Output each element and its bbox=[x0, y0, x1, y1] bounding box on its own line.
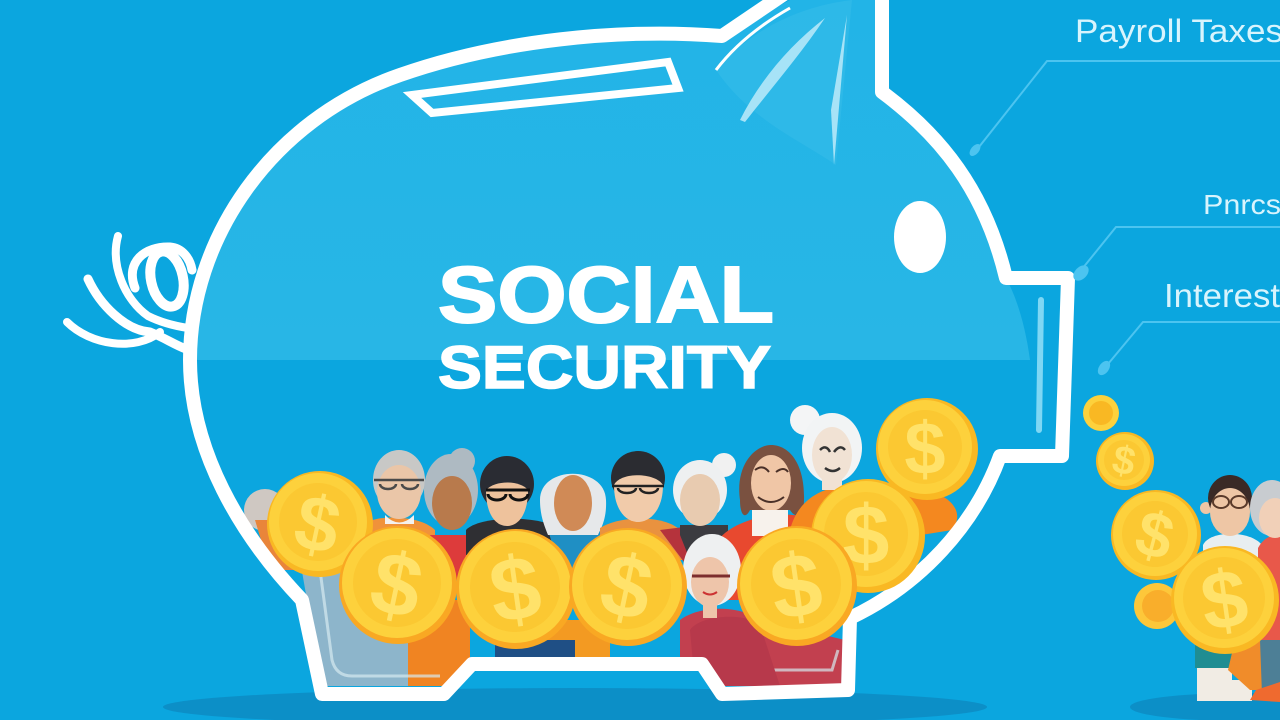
senior grey bun dark skin bbox=[424, 448, 478, 530]
coin large dollar: $ bbox=[1195, 552, 1253, 649]
falling coins on the right bbox=[1083, 395, 1201, 629]
callout: payroll taxes bbox=[967, 13, 1280, 158]
group of seniors inside the bank bbox=[244, 405, 957, 686]
senior far left bbox=[244, 489, 294, 570]
coin 7: $ bbox=[904, 407, 946, 490]
coins inside the bank bbox=[267, 398, 978, 649]
senior white hair bbox=[540, 474, 610, 570]
senior brown hair red jacket bbox=[722, 445, 804, 600]
coin large dollar bbox=[1171, 546, 1279, 654]
piggy bank outline bbox=[190, 0, 1068, 694]
coin 2 bbox=[339, 526, 457, 644]
ear highlights bbox=[716, 8, 847, 165]
senior white bun bbox=[673, 453, 736, 560]
coin 4 bbox=[569, 528, 687, 646]
coin 6 bbox=[811, 479, 925, 593]
lower bodies seen through glass bbox=[302, 573, 842, 686]
coin 5 bbox=[737, 526, 857, 646]
legs and lower bodies bbox=[1195, 610, 1280, 702]
coin 4: $ bbox=[592, 533, 661, 640]
coin 2: $ bbox=[362, 531, 431, 638]
coin small plain bbox=[1083, 395, 1119, 431]
coin small dollar bbox=[1096, 432, 1154, 490]
coin 7 bbox=[876, 398, 978, 500]
title bbox=[438, 250, 774, 401]
coin 6: $ bbox=[843, 488, 889, 582]
title: SECURITY bbox=[438, 334, 771, 401]
coin plain behind bbox=[1134, 583, 1180, 629]
ground shadow under piggy bank bbox=[163, 688, 987, 720]
senior in orange with glasses bbox=[372, 450, 435, 536]
senior with black glasses and dark jacket bbox=[430, 456, 560, 580]
senior with glasses and orange jacket bbox=[600, 451, 687, 562]
senior front white hair maroon top bbox=[683, 534, 780, 686]
coin slot bbox=[412, 62, 678, 113]
senior white hair orange top bbox=[790, 405, 958, 534]
coin 1: $ bbox=[287, 476, 348, 572]
eye bbox=[894, 201, 946, 273]
coin 5: $ bbox=[765, 534, 828, 640]
snout highlight bbox=[1039, 300, 1041, 430]
coin 3: $ bbox=[484, 537, 547, 643]
right group of seniors bbox=[1171, 475, 1280, 702]
title: SOCIAL bbox=[438, 250, 774, 339]
curly tail bbox=[67, 236, 192, 349]
ground shadow under right group bbox=[1130, 693, 1280, 720]
callout: garbled label bbox=[1070, 189, 1280, 284]
man with glasses bbox=[1200, 475, 1262, 560]
callout: garbled label: Pnrcs bbox=[1203, 189, 1280, 220]
callout: interest: Interest bbox=[1164, 277, 1280, 314]
coin 1 bbox=[267, 471, 373, 577]
coin medium dollar: $ bbox=[1128, 496, 1181, 574]
callout: interest bbox=[1095, 277, 1280, 377]
callout: payroll taxes: Payroll Taxes bbox=[1075, 13, 1280, 49]
piggy bank glass fill bbox=[180, 0, 1040, 360]
coin small dollar: $ bbox=[1108, 437, 1139, 485]
coin medium dollar bbox=[1111, 490, 1201, 580]
coin 3 bbox=[456, 529, 576, 649]
woman with grey hair bbox=[1250, 480, 1280, 640]
